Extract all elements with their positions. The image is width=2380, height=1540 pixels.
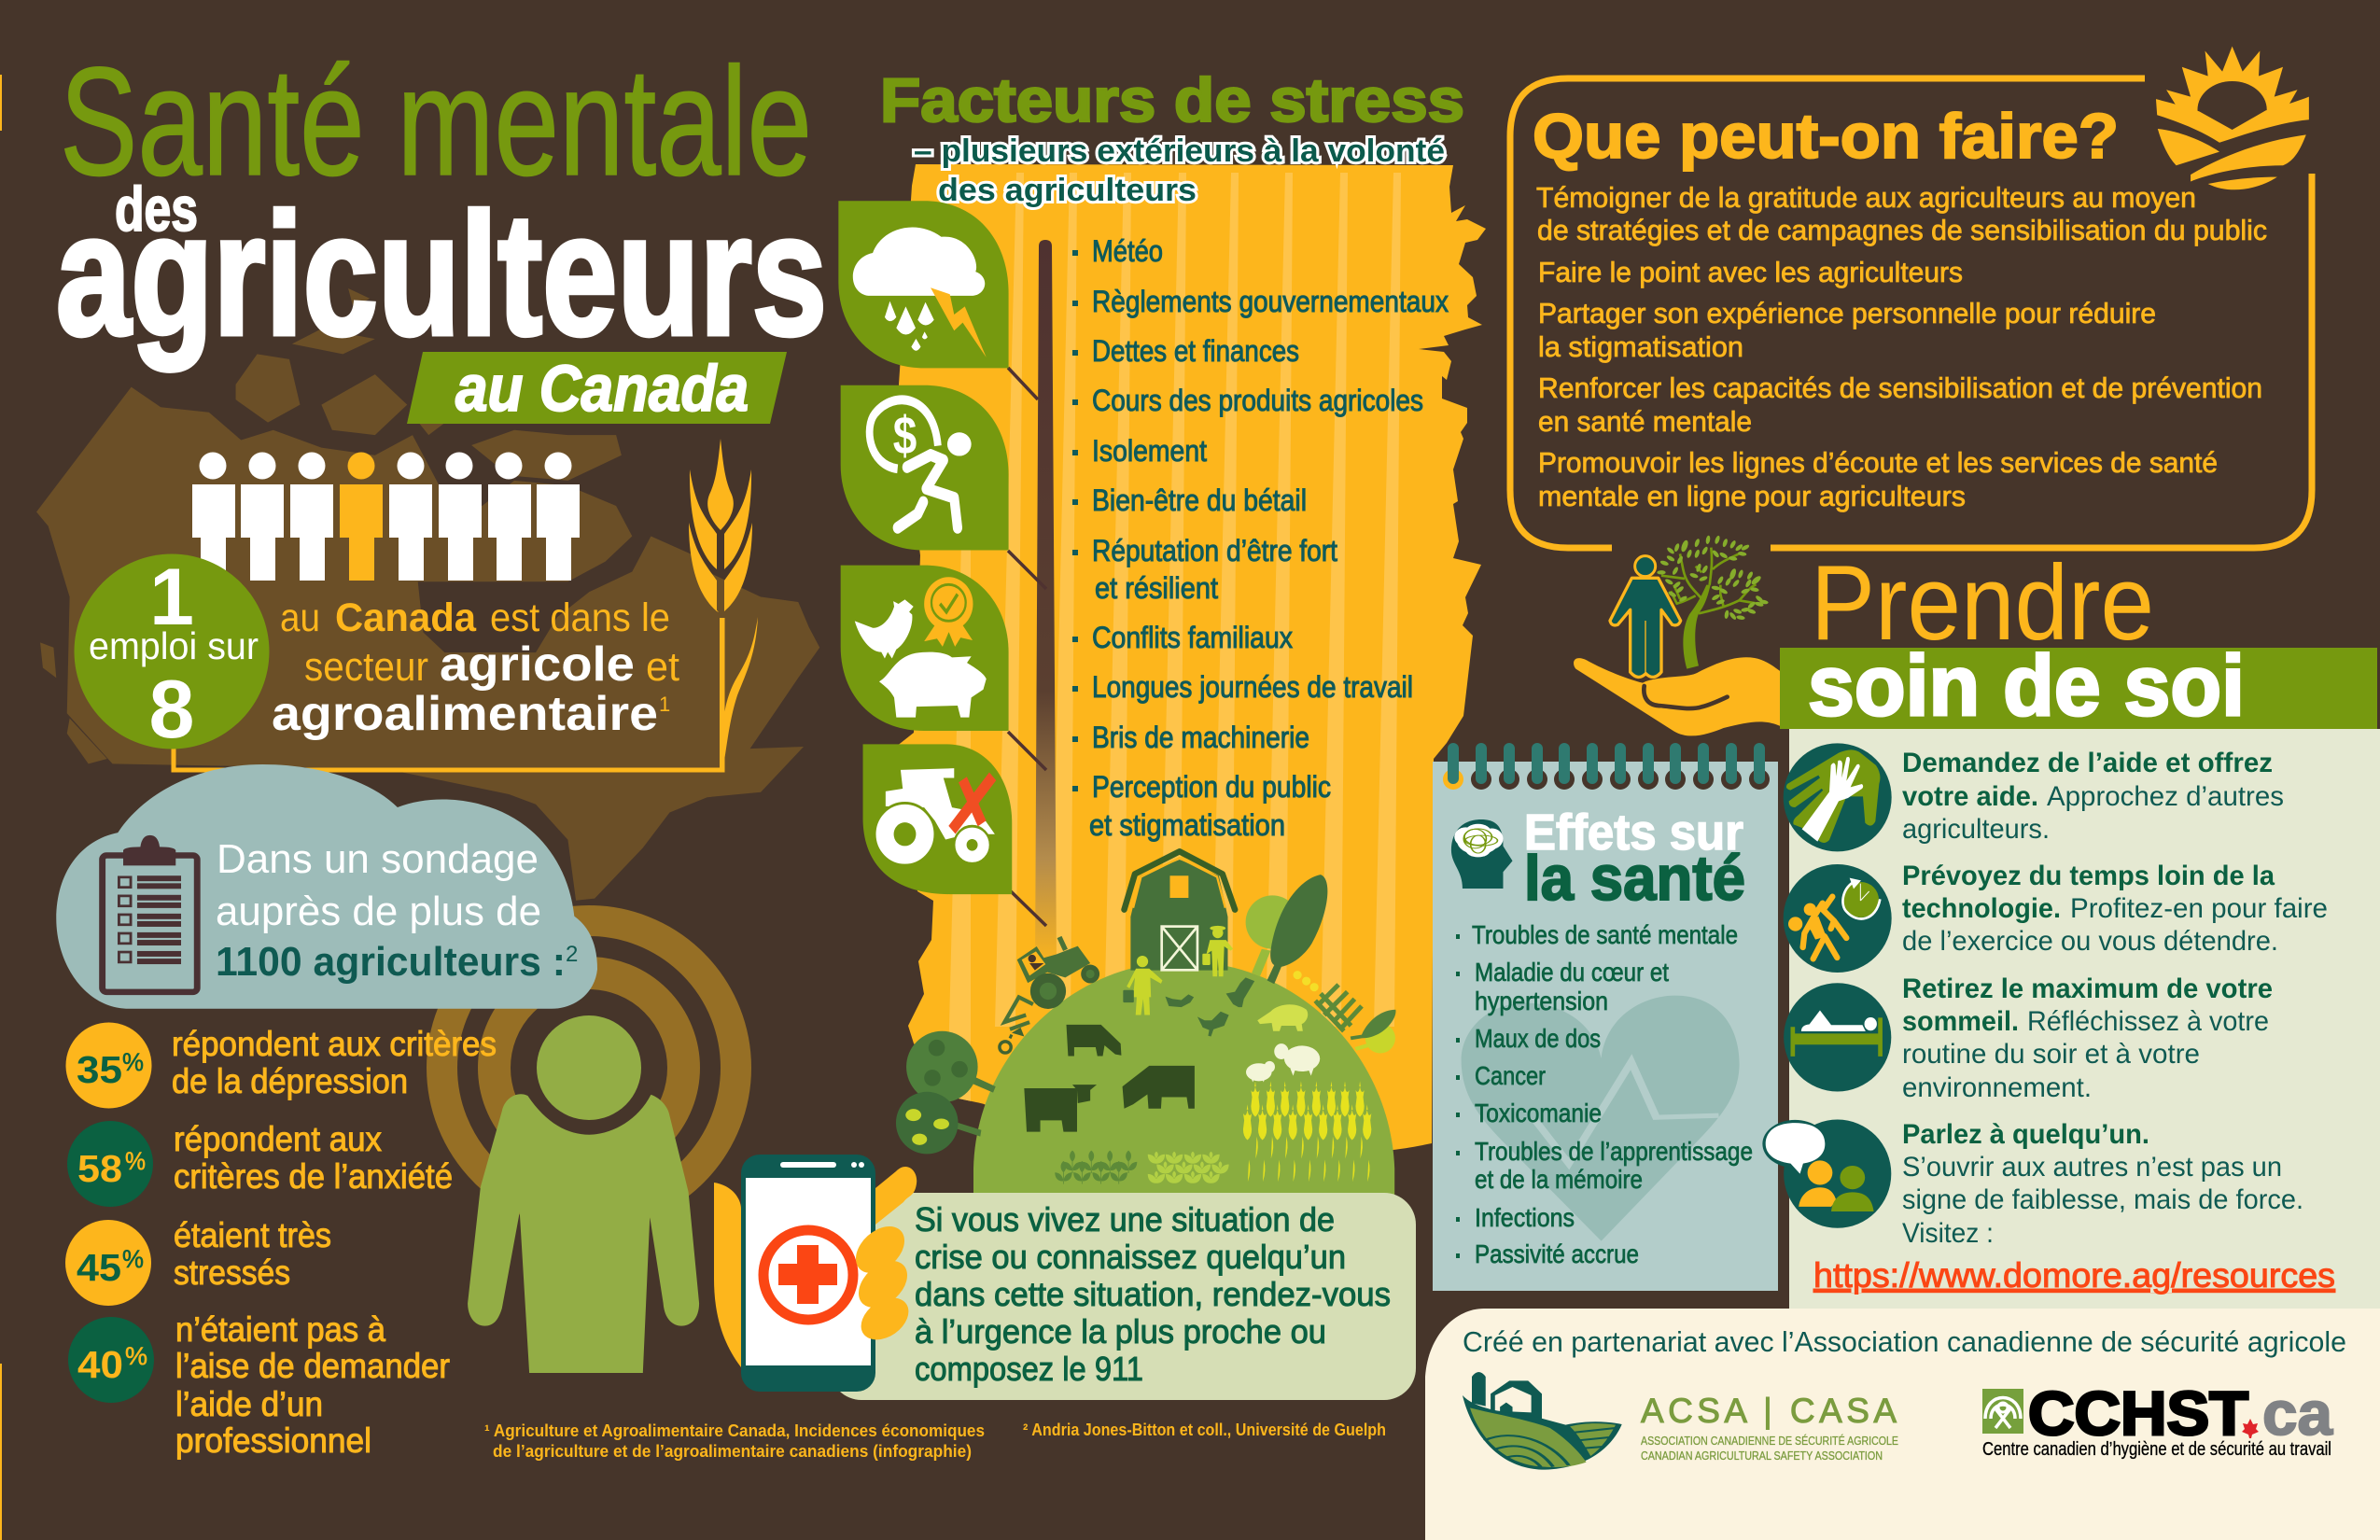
stat: 35% (65, 1023, 497, 1109)
text: share of jobs: secteur (304, 644, 428, 690)
cows (1024, 1025, 1195, 1132)
heading: Facteurs de stress: Facteurs de stress (880, 65, 1464, 134)
icon: phone in hand (714, 1155, 917, 1392)
banner: soin de soi: soin de soi (1808, 638, 2245, 734)
logo: CCHST (1982, 1379, 2333, 1460)
icon: running from debt leaf (841, 385, 1009, 551)
stat: 45%: étaient très (174, 1216, 331, 1254)
circle: 1 emploi sur 8: emploi sur (89, 624, 259, 667)
link: resources: https://www.domore.ag/resources (1813, 1256, 2335, 1295)
icon: sun over fields (2156, 47, 2309, 189)
list: stress factors: Conflits familiaux (1092, 621, 1293, 654)
logo: ACSA CASA: ACSA | CASA (1641, 1392, 1897, 1430)
callout: crisis (830, 1193, 1416, 1400)
notebook: health effects: Effets sur (1524, 805, 1743, 861)
footnote 1 (484, 1421, 985, 1461)
icon: weather leaf (838, 201, 1009, 368)
list: health effects: Troubles de santé mentale (1472, 920, 1738, 949)
panel: self care (1789, 729, 2380, 1312)
list: what can we do: mentale en ligne pour agriculteurs (1538, 480, 1966, 512)
wheat rows (1243, 1081, 1371, 1182)
list: stress factors: Cours des produits agricoles (1092, 384, 1423, 417)
list: stress factors (1072, 234, 1449, 842)
cloud: survey (56, 764, 597, 1009)
stat: 58%: % (125, 1147, 146, 1175)
logo: CCHST: CCHST (2028, 1379, 2248, 1448)
list: health effects (1456, 920, 1753, 1268)
callout: crisis: crise ou connaissez quelqu’un (915, 1238, 1346, 1276)
callout: crisis: dans cette situation, rendez-vous (915, 1275, 1391, 1313)
stat: 58%: critères de l’anxiété (174, 1157, 453, 1196)
timeline bar and connectors (1008, 240, 1057, 968)
stat: 35%: de la dépression (172, 1062, 408, 1100)
frame around statistic (174, 618, 722, 770)
stat: 40%: professionnel (175, 1421, 371, 1460)
panel: partners (1425, 1309, 2380, 1540)
text: share of jobs: agricole (440, 637, 635, 692)
tip: sleep: sommeil. (1902, 1006, 2019, 1037)
list: what can we do: Partager son expérience personnelle pour réduire (1538, 297, 2156, 329)
text: share of jobs: agroalimentaire (272, 687, 658, 741)
list: what can we do (1536, 181, 2267, 512)
stat: 45%: 45 (77, 1246, 121, 1289)
list: stress factors: Bien-être du bétail (1092, 483, 1307, 517)
flowers and fence (1294, 971, 1362, 1031)
list: stress factors: Perception du public (1092, 770, 1331, 804)
tip: sleep: Retirez le maximum de votre (1902, 973, 2273, 1004)
hill (973, 961, 1394, 1197)
panel: stress factors background (896, 164, 1486, 1151)
tip: time away from technology: Profitez-en pour faire (2070, 893, 2328, 924)
tip: ask for help: agriculteurs. (1902, 814, 2050, 845)
list: health effects: hypertension (1475, 987, 1608, 1015)
heart watermark (1462, 996, 1740, 1241)
logo: ACSA CASA: ASSOCIATION CANADIENNE DE SÉCURITÉ AGRICOLE (1641, 1434, 1898, 1448)
stat: 40%: l’aide d’un (175, 1385, 323, 1423)
map of Canada (36, 288, 819, 901)
list: what can we do: Témoigner de la gratitude aux agriculteurs au moyen (1536, 181, 2196, 214)
callout: crisis: Si vous vivez une situation de (915, 1200, 1335, 1239)
panel: partners: Créé en partenariat avec l’Association canadienne de sécurité agricole (1463, 1325, 2346, 1358)
list: what can we do: de stratégies et de campagnes de sensibilisation du public (1537, 214, 2267, 246)
subheading (914, 133, 1445, 208)
pictogram: 8 people (192, 452, 580, 581)
stat: 45%: % (122, 1245, 144, 1273)
stat: 45% (65, 1216, 331, 1306)
callout: crisis: composez le 911 (915, 1350, 1143, 1388)
tip: ask for help: Approchez d’autres (2047, 781, 2284, 812)
icon: clipboard (103, 835, 197, 992)
stat: 40% (68, 1310, 450, 1460)
pig (1257, 1004, 1308, 1031)
stat: 40%: 40 (77, 1343, 123, 1386)
notebook: health effects: la santé (1524, 843, 1745, 914)
stat: 58%: répondent aux (174, 1120, 382, 1158)
tip: sleep: Réfléchissez à votre (2027, 1006, 2269, 1037)
list: health effects: Infections (1475, 1203, 1575, 1232)
logo: ACSA CASA: CANADIAN AGRICULTURAL SAFETY ASSOCIATION (1641, 1449, 1883, 1463)
list: stress factors: Météo (1092, 234, 1163, 268)
list: health effects: Cancer (1475, 1061, 1546, 1090)
stat: 58% (67, 1120, 453, 1207)
text: share of jobs (272, 595, 679, 741)
stat: 40%: n’étaient pas à (175, 1310, 385, 1349)
cloud: survey: auprès de plus de (216, 889, 541, 934)
subheading: – plusieurs extérieurs à la volonté (914, 133, 1445, 169)
tractor (1000, 936, 1099, 1053)
tip: talk to someone: S’ouvrir aux autres n’est pas un (1902, 1152, 2282, 1183)
tip: time away from technology (1784, 861, 2328, 973)
tip: talk to someone (1762, 1119, 2303, 1249)
list: health effects: Troubles de l’apprentissage (1475, 1137, 1753, 1166)
chickens (1166, 977, 1254, 1036)
stat: 40%: l’aise de demander (175, 1347, 450, 1385)
title: Prendre: Prendre (1811, 544, 2154, 663)
list: health effects: Maladie du cœur et (1475, 958, 1669, 987)
icon: head with tangled thoughts (1451, 819, 1513, 889)
trees (896, 875, 1396, 1154)
list: stress factors: et résilient (1095, 571, 1218, 605)
text: share of jobs: 1 (659, 693, 670, 716)
list: health effects: Passivité accrue (1475, 1239, 1639, 1268)
tip: sleep (1784, 973, 2273, 1103)
list: health effects: Maux de dos (1475, 1024, 1601, 1053)
circle: 1 emploi sur 8: 8 (149, 663, 194, 755)
tip: time away from technology: technologie. (1902, 893, 2061, 924)
list: health effects: Toxicomanie (1475, 1099, 1602, 1127)
tip: time away from technology: Prévoyez du temps loin de la (1902, 861, 2275, 891)
list: what can we do: Renforcer les capacités de sensibilisation et de prévention (1538, 371, 2262, 404)
footnote 2: ² Andria Jones-Bitton et coll., Université de Guelph (1023, 1421, 1386, 1439)
callout: crisis: à l’urgence la plus proche ou (915, 1312, 1326, 1351)
tip: sleep: routine du soir et à votre (1902, 1039, 2200, 1070)
tip: talk to someone: Parlez à quelqu’un. (1902, 1119, 2149, 1150)
list: what can we do: la stigmatisation (1538, 330, 1743, 363)
logo: ACSA CASA (1463, 1372, 1898, 1470)
subheading: des agriculteurs (938, 173, 1197, 208)
title: des: des (115, 175, 198, 245)
footnote 1: ¹ Agriculture et Agroalimentaire Canada, Incidences économiques (484, 1421, 985, 1440)
icon: broken tractor leaf (863, 744, 1012, 894)
text: share of jobs: Canada (335, 595, 477, 640)
cloud: survey: 1100 agriculteurs : (216, 939, 566, 985)
text: share of jobs: et (646, 644, 679, 690)
logo: CCHST: ca (2262, 1379, 2333, 1448)
cloud: survey: 2 (566, 942, 578, 967)
stat: 45%: stressés (174, 1253, 290, 1292)
list: stress factors: et stigmatisation (1089, 808, 1285, 842)
title: Santé mentale: Santé mentale (60, 35, 812, 207)
footnote 1: de l’agriculture et de l’agroalimentaire canadiens (infographie) (493, 1442, 972, 1461)
heading: Que peut-on faire?: Que peut-on faire? (1533, 101, 2119, 172)
icon: hand holding person and tree (1574, 535, 1781, 735)
figure: person (468, 1015, 699, 1373)
target rings (442, 920, 735, 1215)
stat: 58%: 58 (77, 1147, 122, 1190)
spiral binding (1443, 743, 1770, 790)
icon: wheat (689, 439, 758, 772)
frame: what can we do (1510, 78, 2312, 548)
barn (1124, 851, 1235, 971)
circle: 1 emploi sur 8 (75, 553, 269, 755)
farmers (1123, 926, 1233, 1015)
text: share of jobs: est dans le (490, 595, 670, 640)
list: stress factors: Longues journées de travail (1092, 670, 1413, 704)
stat: 35%: % (122, 1048, 144, 1076)
list: what can we do: Faire le point avec les agriculteurs (1538, 256, 1963, 288)
tip: ask for help (1784, 743, 2284, 851)
icon: livestock leaf (841, 566, 1009, 731)
crops (1055, 1151, 1229, 1184)
tip: sleep: environnement. (1902, 1072, 2092, 1103)
tip: ask for help: Demandez de l’aide et offrez (1902, 748, 2273, 778)
list: stress factors: Règlements gouvernementaux (1092, 285, 1449, 318)
tip: talk to someone: signe de faiblesse, mais de force. (1902, 1184, 2303, 1215)
list: stress factors: Bris de machinerie (1092, 721, 1309, 754)
illustration: farm hill (896, 851, 1396, 1197)
stat: 40%: % (125, 1342, 147, 1370)
list: what can we do: en santé mentale (1538, 405, 1752, 438)
circle: 1 emploi sur 8: 1 (149, 553, 194, 642)
stat: 35%: 35 (77, 1048, 122, 1091)
list: stress factors: Isolement (1092, 434, 1207, 468)
text: share of jobs: au (280, 595, 320, 640)
icon: running from debt leaf: $ (893, 406, 917, 466)
cloud: survey: Dans un sondage (217, 836, 539, 882)
title: agriculteurs: agriculteurs (56, 178, 827, 371)
tip: ask for help: votre aide. (1902, 781, 2038, 812)
list: stress factors: Dettes et finances (1092, 334, 1299, 368)
banner: au Canada: au Canada (455, 352, 749, 425)
sheep (1246, 1043, 1320, 1082)
notebook: health effects (1433, 743, 1778, 1291)
list: what can we do: Promouvoir les lignes d’écoute et les services de santé (1538, 446, 2218, 479)
tip: time away from technology: de l’exercice ou vous détendre. (1902, 926, 2278, 957)
stat: 35%: répondent aux critères (172, 1025, 497, 1063)
tip: talk to someone: Visitez : (1902, 1218, 1994, 1249)
list: stress factors: Réputation d’être fort (1092, 534, 1337, 567)
list: health effects: et de la mémoire (1475, 1165, 1643, 1194)
